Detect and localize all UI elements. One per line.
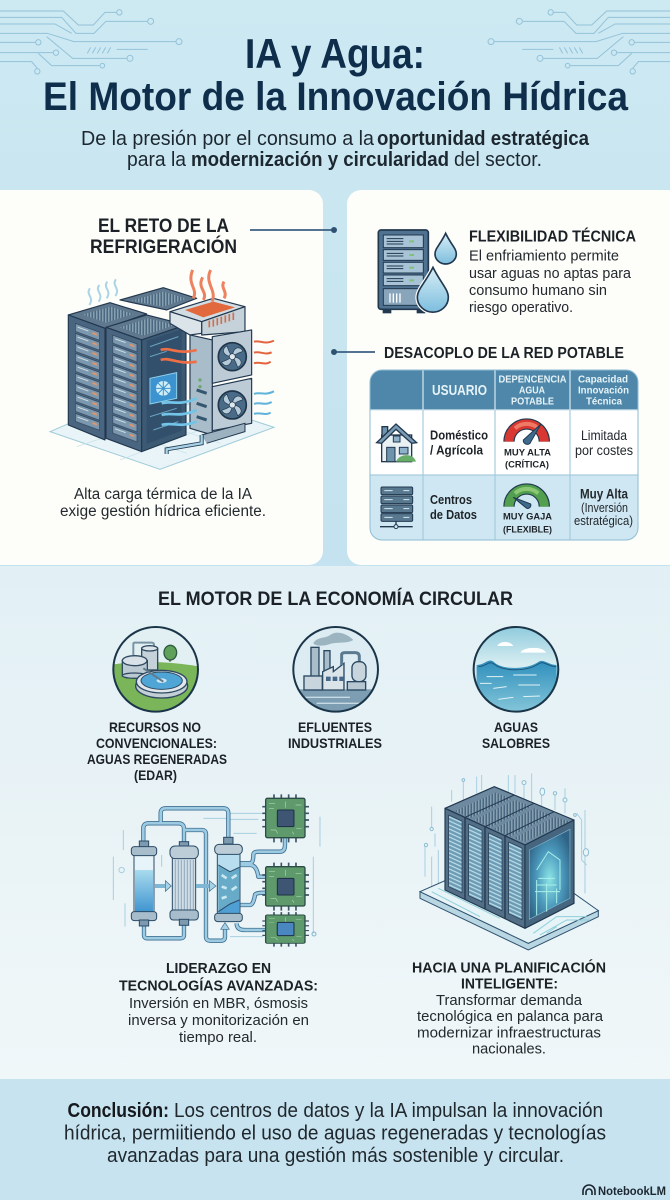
row: centros de datos bbox=[430, 492, 477, 522]
text: muy alta inversión: (Inversión bbox=[581, 501, 628, 515]
illustration: servers with cooling bbox=[50, 270, 274, 469]
text: planificación bbox=[412, 958, 606, 1058]
filter 1 bbox=[139, 841, 149, 848]
item: planificación inteligente bbox=[412, 773, 606, 1058]
text: limitada: Limitada bbox=[581, 428, 627, 443]
heading: reto: EL RETO DE LA bbox=[98, 216, 229, 237]
text: flexibilidad: consumo humano sin bbox=[469, 282, 607, 299]
heading: reto: REFRIGERACIÓN bbox=[90, 236, 237, 258]
label: aguas salobres bbox=[482, 719, 550, 751]
heading: economía circular: EL MOTOR DE LA ECONOMÍA CIRCULAR bbox=[158, 588, 513, 610]
text: muy alta inversión bbox=[574, 486, 633, 528]
left rack bbox=[68, 303, 147, 328]
text: conclusión: avanzadas para una gestión más sostenible y circular. bbox=[107, 1145, 564, 1167]
subtitle: del sector. bbox=[454, 149, 542, 171]
text: conclusión: Los centros de datos y la IA impulsan la innovación bbox=[174, 1100, 603, 1122]
row: doméstico: / Agrícola bbox=[430, 442, 484, 458]
flow arrows bbox=[155, 880, 166, 892]
text: flexibilidad: El enfriamiento permite bbox=[469, 248, 619, 264]
filter 3 bbox=[224, 837, 233, 844]
label: efluentes: EFLUENTES bbox=[298, 719, 372, 735]
caption: carga térmica: Alta carga térmica de la IA bbox=[74, 486, 253, 503]
subtitle: De la presión por el consumo a la bbox=[81, 128, 375, 150]
gauge: muy alta bbox=[504, 424, 551, 470]
table header: Técnica bbox=[586, 396, 622, 408]
text: conclusión: hídrica, permiitiendo el uso de aguas regeneradas y tecnologías bbox=[64, 1122, 606, 1144]
panel: el reto de la refrigeración bbox=[0, 190, 323, 565]
logo: NotebookLM: NotebookLM bbox=[598, 1186, 666, 1198]
back rack bbox=[120, 288, 197, 310]
label: recursos no convencionales: RECURSOS NO bbox=[109, 719, 201, 735]
table header bbox=[432, 374, 629, 408]
subtitle bbox=[81, 128, 590, 171]
gauge: muy baja: MUY GAJA bbox=[503, 512, 552, 522]
gauge: muy alta: MUY ALTA bbox=[504, 448, 551, 458]
row: centros de datos: de Datos bbox=[430, 507, 477, 522]
gauge: muy baja: (FLEXIBLE) bbox=[503, 524, 552, 536]
pipes bbox=[143, 823, 184, 843]
text: limitada: por costes bbox=[575, 443, 633, 458]
illustration: membrane filters and chips bbox=[113, 794, 320, 947]
table header: Capacidad bbox=[578, 374, 628, 386]
table header: Innovación bbox=[578, 384, 629, 396]
item: efluentes industriales bbox=[288, 627, 382, 751]
icon: wastewater plant bbox=[110, 627, 200, 717]
icon: sea waves bbox=[473, 627, 560, 717]
text: planificación: tecnológica en palanca para bbox=[417, 1009, 604, 1025]
chiller unit bbox=[170, 298, 245, 322]
text: limitada bbox=[575, 428, 633, 458]
text: liderazgo: TECNOLOGÍAS AVANZADAS: bbox=[119, 978, 318, 994]
row: doméstico bbox=[430, 428, 488, 458]
gauge: muy alta: (CRÍTICA) bbox=[505, 460, 549, 470]
table header: DEPENCENCIA bbox=[498, 374, 567, 386]
label: recursos no convencionales: (EDAR) bbox=[134, 767, 177, 783]
heading: flexibilidad técnica: FLEXIBILIDAD TÉCNICA bbox=[469, 228, 636, 246]
table header: POTABLE bbox=[511, 396, 554, 408]
title: IA y Agua: bbox=[245, 30, 425, 77]
subtitle: modernización y circularidad bbox=[191, 149, 449, 171]
label: recursos no convencionales: CONVENCIONALES: bbox=[96, 735, 217, 751]
text: planificación: Transformar demanda bbox=[436, 993, 583, 1009]
icon: house bbox=[377, 424, 417, 462]
table: usuarios bbox=[370, 370, 638, 540]
text: liderazgo bbox=[119, 961, 318, 1046]
circuit decoration: right bbox=[488, 10, 670, 74]
title: El Motor de la Innovación Hídrica bbox=[43, 75, 629, 119]
label: aguas salobres: SALOBRES bbox=[482, 735, 550, 751]
background: header band bbox=[0, 0, 670, 566]
text: conclusión: Conclusión: bbox=[68, 1100, 169, 1122]
chips bbox=[262, 794, 309, 842]
racks bbox=[445, 787, 574, 845]
text: planificación: nacionales. bbox=[472, 1042, 546, 1058]
label: efluentes: INDUSTRIALES bbox=[288, 735, 382, 751]
text: flexibilidad bbox=[469, 248, 632, 316]
text: liderazgo: tiempo real. bbox=[179, 1030, 257, 1046]
icon: factory bbox=[293, 627, 380, 713]
caption: carga térmica: exige gestión hídrica eficiente. bbox=[60, 503, 266, 520]
circuit decoration: left bbox=[0, 10, 182, 74]
illustration: data center on platform bbox=[420, 773, 598, 950]
text: muy alta inversión: Muy Alta bbox=[580, 486, 628, 502]
text: flexibilidad: riesgo operativo. bbox=[469, 299, 573, 316]
text: flexibilidad: usar aguas no aptas para bbox=[469, 265, 632, 282]
text: planificación: INTELIGENTE: bbox=[461, 976, 558, 992]
label: recursos no convencionales: AGUAS REGENERADAS bbox=[87, 751, 227, 767]
gauge: muy baja bbox=[503, 489, 552, 536]
row: doméstico: Doméstico bbox=[430, 428, 488, 442]
text: liderazgo: Inversión en MBR, ósmosis bbox=[129, 996, 308, 1012]
text: planificación: HACIA UNA PLANIFICACIÓN bbox=[412, 958, 606, 976]
title bbox=[43, 30, 629, 119]
item: tecnologías avanzadas bbox=[113, 794, 320, 1046]
text: conclusión bbox=[64, 1100, 606, 1167]
header bbox=[0, 10, 670, 171]
table header: AGUA bbox=[519, 384, 545, 396]
table header: USUARIO bbox=[432, 383, 487, 399]
heading: desacoplo: DESACOPLO DE LA RED POTABLE bbox=[384, 345, 624, 362]
heading: reto bbox=[90, 216, 237, 258]
icon: server with water drops bbox=[378, 230, 456, 313]
front rack bbox=[106, 315, 186, 340]
text: liderazgo: inversa y monitorización en bbox=[128, 1013, 309, 1029]
label: efluentes bbox=[288, 719, 382, 751]
subtitle: oportunidad estratégica bbox=[377, 128, 590, 150]
connector: reto to flexibilidad bbox=[250, 227, 337, 233]
steam: cool bbox=[89, 279, 117, 305]
filter 2 bbox=[179, 842, 189, 848]
label: aguas salobres: AGUAS bbox=[494, 719, 538, 735]
airflow: hot bbox=[191, 270, 225, 302]
airflow: cold bbox=[162, 398, 197, 425]
row: centros de datos: Centros bbox=[430, 492, 472, 507]
panel: flexibilidad y desacoplo bbox=[347, 190, 670, 565]
caption: carga térmica bbox=[60, 486, 266, 520]
conclusion band bbox=[0, 1079, 670, 1200]
text: muy alta inversión: estratégica) bbox=[574, 514, 633, 528]
text: liderazgo: LIDERAZGO EN bbox=[166, 961, 271, 977]
label: recursos no convencionales bbox=[87, 719, 227, 783]
text: planificación: modernizar infraestructuras bbox=[417, 1026, 601, 1042]
item: aguas salobres bbox=[473, 627, 560, 751]
connector: reto to desacoplo bbox=[331, 349, 375, 355]
item: aguas regeneradas bbox=[87, 627, 227, 783]
subtitle: para la bbox=[127, 149, 187, 171]
icon: data center bbox=[380, 487, 413, 529]
section: economía circular bbox=[0, 566, 670, 1080]
platform bbox=[420, 892, 598, 950]
